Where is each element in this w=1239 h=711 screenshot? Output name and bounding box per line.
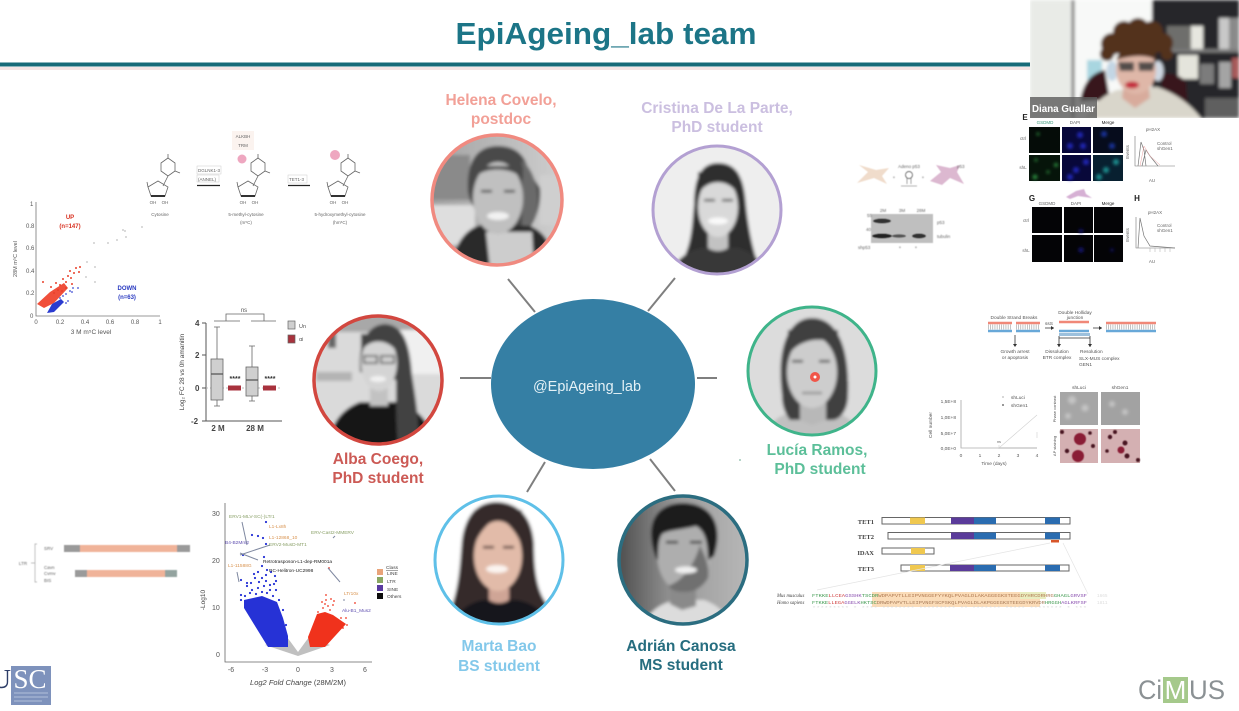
diagram: double strand break repair: Double Strand Breaks <box>991 315 1038 321</box>
legend: αi <box>299 337 303 343</box>
chart: m5C scatter plot: 0.2 <box>56 320 65 326</box>
diagram: double strand break repair: SLX-MUS complex <box>1079 356 1120 362</box>
panel H: histogram: Events <box>1125 227 1130 242</box>
centre hub: @EpiAgeing_lab: @EpiAgeing_lab <box>533 378 641 395</box>
chart: box plot log2 FC: ns <box>241 308 247 314</box>
molecule: cytosine <box>147 154 180 217</box>
volcano: gene labels: ERV1-MLV-SC(-)LTr1 <box>229 514 275 520</box>
panel E: immunofluorescence images: Merge <box>1102 120 1115 125</box>
volcano: gene labels: L1-12868_10 <box>269 535 298 541</box>
sequence alignment: Homo sapiens <box>776 601 804 606</box>
sequence alignment: 1811 <box>1097 601 1108 606</box>
webcam: mug <box>1087 60 1102 80</box>
western blot: 40 <box>866 227 872 232</box>
label: Marta Bao: BS student <box>458 658 540 675</box>
chart: box plot log2 FC: 4 <box>195 319 200 328</box>
portrait: Helena Covelo <box>430 134 564 268</box>
panel H: histogram: H <box>1134 194 1140 203</box>
volcano: callout lines <box>237 522 345 600</box>
volcano: legend: LINE <box>387 571 398 577</box>
chart: m5C scatter plot: 0.6 <box>26 246 35 252</box>
western blot: 3M <box>899 208 905 213</box>
chart: volcano plot <box>200 503 402 687</box>
chart: m5C scatter plot: 1 <box>30 202 34 208</box>
chart: m5C scatter plot <box>12 202 162 336</box>
scatter: grey points <box>86 227 142 282</box>
micrographs: phase contrast and AP staining: shLuci <box>1072 385 1086 391</box>
sequence alignment: Mus musculus <box>776 594 804 599</box>
logo: CiMUS: US <box>1189 675 1225 705</box>
panel G: immunofluorescence images: shL <box>1022 248 1030 253</box>
volcano: gene labels <box>225 514 371 614</box>
chart: box plot log2 FC: 2 M <box>211 424 225 433</box>
label: Adrián Canosa <box>626 638 736 674</box>
panel E: immunofluorescence images <box>1019 113 1123 181</box>
panel H: histogram <box>1125 194 1175 264</box>
panel E: histogram: Events <box>1125 144 1130 159</box>
panel E: histogram: pH2AX <box>1146 127 1160 132</box>
IDAX bar <box>882 548 934 554</box>
diagram: TET domain architecture <box>817 518 1088 594</box>
TET3 bar <box>901 565 1069 571</box>
chart: volcano plot: -3 <box>262 667 268 674</box>
panel E: histogram: Control <box>1157 141 1172 146</box>
sequence alignment: FTKKE LLEGA GGELK HKTSC DRWDPAPVTLLEIPVNGFSCPSKQLPVAGLDLAKPGGEGKSTEEGDYKRVDR HRGGH AGLKRFSF <box>812 601 1087 606</box>
panel G: immunofluorescence images: G <box>1029 194 1035 203</box>
chart: cell number growth curve <box>928 395 1039 467</box>
volcano: gene labels: L1-Lx8h <box>269 524 287 530</box>
molecule: 5-methyl-cytosine: TRM <box>238 143 248 148</box>
molecule: 5-methyl-cytosine: OH <box>240 200 246 205</box>
molecule: cytosine: Cytosine <box>151 212 169 217</box>
diagram: LTR structures: SRV <box>44 546 53 551</box>
molecule: 5-hydroxymethyl-cytosine: 5-hydroxymethyl-cytosine <box>314 212 366 217</box>
panel E: immunofluorescence images: DAPI <box>1070 120 1080 125</box>
diagram: LTR structures: Cavn <box>44 565 55 570</box>
chart: m5C scatter plot: 0.8 <box>26 224 35 230</box>
panel E: histogram <box>1125 127 1175 183</box>
chart: box plot log2 FC: 0 <box>195 384 200 393</box>
chart: m5C scatter plot: (n=63) <box>118 295 136 301</box>
volcano: gene labels: ERV2-MusD-MT1 <box>269 542 307 548</box>
label: Lucía Ramos: Lucía Ramos, <box>767 442 867 459</box>
webcam: neck <box>1121 88 1151 108</box>
chart: volcano plot: 6 <box>363 667 367 674</box>
label: Adrián Canosa: Adrián Canosa <box>626 638 736 655</box>
volcano: non-significant <box>265 637 330 656</box>
micrographs: phase contrast and AP staining: AP staining <box>1052 436 1057 456</box>
molecule: 5-methyl-cytosine: OH <box>252 200 258 205</box>
volcano: gene labels: B4-B2Mm2 <box>225 540 249 546</box>
chart: cell number growth curve: 0 <box>960 453 963 459</box>
panel E: immunofluorescence images: shL <box>1019 165 1027 170</box>
western blot: 55 <box>867 213 873 218</box>
chart: box plot log2 FC: 28 M <box>246 424 264 433</box>
label: Alba Coego <box>332 451 424 487</box>
icon: red pointer dot <box>810 372 820 382</box>
logo: CiMUS <box>1138 675 1225 705</box>
chart: box plot log2 FC: Log₂ FC 28 vs 0h amanitin <box>179 333 186 410</box>
molecule: 5-methyl-cytosine <box>228 131 270 225</box>
chart: volcano plot: 0 <box>216 652 220 659</box>
diagram: p53 knockdown cells <box>857 164 965 186</box>
webcam: face <box>1114 53 1158 93</box>
molecule: 5-methyl-cytosine: ALKBH <box>236 134 250 139</box>
chart: cell number growth curve: 1,5E+8 <box>941 399 956 405</box>
chart: box plot log2 FC: **** <box>265 376 276 383</box>
chart: volcano plot: 3 <box>330 667 334 674</box>
western blot: shp53 <box>858 245 871 250</box>
webcam: headphones <box>1106 61 1118 81</box>
chart: cell number growth curve: 1,0E+8 <box>941 415 956 421</box>
chart: m5C scatter plot: 0.4 <box>26 269 35 275</box>
portrait: Lucía Ramos <box>746 305 878 437</box>
diagram: TET domain architecture: TET3 <box>858 566 875 573</box>
chart: cell number growth curve: 4 <box>1036 453 1039 459</box>
diagram: p53 knockdown cells: + <box>922 175 925 180</box>
panel E: histogram: shGen1 <box>1157 146 1173 151</box>
chart: volcano plot: 0 <box>296 667 300 674</box>
chart: m5C scatter plot: 0.6 <box>106 320 115 326</box>
chart: m5C scatter plot: UP <box>66 215 74 221</box>
chart: cell number growth curve: Time (days) <box>981 461 1007 467</box>
volcano: legend <box>377 565 402 600</box>
panel H: histogram: shGen1 <box>1157 228 1173 233</box>
western blot: + <box>915 245 918 250</box>
panel H: histogram: Control <box>1157 223 1172 228</box>
label: Adrián Canosa: MS student <box>639 657 723 674</box>
chart: box plot log2 FC: **** <box>230 376 241 383</box>
title: EpiAgeing_lab team <box>456 16 756 51</box>
diagram: double strand break repair: ssS <box>1045 321 1053 327</box>
enzyme arrows <box>197 166 310 186</box>
diagram: double strand break repair: junction <box>1066 315 1084 321</box>
diagram: double strand break repair: Dissolution <box>1045 349 1069 355</box>
chart: box plot log2 FC <box>179 308 306 433</box>
chart: cell number growth curve: Cell number <box>928 412 934 438</box>
chart: m5C scatter plot: 1 <box>158 320 162 326</box>
diagram: double strand break repair <box>988 310 1156 368</box>
chart: cell number growth curve: 5,0E+7 <box>941 431 956 437</box>
logo: CiMUS: Ci <box>1138 675 1162 705</box>
western blot: + <box>899 245 902 250</box>
western blot: tubulin <box>937 234 951 239</box>
diagram: LTR structures <box>19 544 190 583</box>
diagram: LTR structures: Cvmv <box>44 571 56 576</box>
molecule: 5-hydroxymethyl-cytosine: OH <box>342 200 348 205</box>
volcano: gene labels: Alu-B1_Mus2 <box>342 608 371 614</box>
volcano: legend: SINE <box>387 587 398 593</box>
portrait: Marta Bao <box>434 495 564 628</box>
label: Cristina De La Parte: Cristina De La Parte, <box>641 100 793 117</box>
chart: m5C scatter plot: (n=147) <box>59 224 81 230</box>
chart: volcano plot: -6 <box>228 667 234 674</box>
micrographs: phase contrast and AP staining: shGen1 <box>1112 385 1129 391</box>
logo: USC: SC <box>13 664 47 694</box>
diagram: LTR structures: BIS <box>44 578 51 583</box>
molecule: 5-methyl-cytosine: (m⁵C) <box>240 220 252 225</box>
chart: m5C scatter plot: 0.2 <box>26 291 35 297</box>
panel E: immunofluorescence images: E <box>1022 113 1028 122</box>
chart: m5C scatter plot: 3 M m⁵C level <box>71 329 112 336</box>
sequence alignment: ********* * **** ******** ********* ** ******* ***** ******** * *** <box>812 606 1088 612</box>
chart: cell number growth curve: ns <box>997 440 1001 444</box>
legend <box>288 321 306 343</box>
chart: cell number growth curve: 3 <box>1017 453 1020 459</box>
volcano: up-regulated points <box>308 612 346 647</box>
molecule: 5-methyl-cytosine: 5-methyl-cytosine <box>228 212 264 217</box>
centre hub: @EpiAgeing_lab <box>491 299 695 469</box>
diagram: double strand break repair: Double Holliday <box>1058 310 1092 316</box>
chart: m5C scatter plot: 0.4 <box>81 320 90 326</box>
label: Alba Coego: PhD student <box>332 470 424 487</box>
volcano: legend: Class <box>386 565 399 571</box>
TET2 bar <box>888 532 1070 542</box>
sequence alignment: FTKKE LLCEA GSSHK TSCDR WDPAPVTLLEIPVNGGEFYYKQLPVAGLDLAKAGGEGKSTEEGDYHRCDRHRG GHAGL GRVSF <box>812 594 1087 599</box>
stray speck <box>739 459 741 461</box>
logo: CiMUS: M <box>1165 675 1186 705</box>
label: Alba Coego: Alba Coego, <box>333 451 423 468</box>
diagram: TET domain architecture: TET2 <box>858 534 874 541</box>
chart: volcano plot: 20 <box>212 558 220 565</box>
diagram: TET domain architecture: IDAX <box>857 550 874 557</box>
TET1 bar <box>882 518 1070 524</box>
boxes treated <box>228 386 276 390</box>
label: Marta Bao <box>458 638 540 675</box>
portrait: Alba Coego <box>312 314 444 448</box>
legend: Un <box>299 324 306 330</box>
chart: cell number growth curve: shGen1 <box>1011 403 1028 409</box>
webcam name tag: Diana Guallar <box>1032 103 1095 115</box>
chart: m5C scatter plot: 28M m⁵C level <box>12 241 19 277</box>
diagram: TET domain architecture: TET1 <box>858 519 874 526</box>
chart: box plot log2 FC: -2 <box>191 417 199 426</box>
label: Cristina De La Parte <box>641 100 793 136</box>
diagram: double strand break repair: or apoptosis <box>1002 355 1029 361</box>
portrait: Adrián Canosa <box>618 494 750 628</box>
western blot <box>858 208 951 250</box>
title rule <box>0 62 1030 70</box>
diagram: cytosine methylation pathway <box>147 131 366 225</box>
volcano: gene labels: Retrotrasposon-L1-dep-RM001a <box>263 559 332 565</box>
molecule: 5-hydroxymethyl-cytosine: OH <box>330 200 336 205</box>
enzyme arrows: DGLNK1-3 <box>198 168 221 173</box>
panel G: immunofluorescence images: GSDMD <box>1039 201 1056 206</box>
panel G: immunofluorescence images <box>1022 189 1123 262</box>
panel G: immunofluorescence images: ctrl <box>1023 218 1029 223</box>
diagram: p53 knockdown cells: Adeno p53 <box>898 164 920 169</box>
chart: volcano plot: -Log10 <box>200 590 207 610</box>
chart: cell number growth curve: shLuci <box>1011 395 1025 401</box>
chart: m5C scatter plot: DOWN <box>118 286 136 292</box>
connector lines <box>460 278 717 492</box>
logo: USC <box>0 664 51 705</box>
molecule: 5-hydroxymethyl-cytosine: (hm⁵C) <box>333 220 348 225</box>
enzyme arrows: (ANNEL) <box>198 177 217 182</box>
western blot: p53 <box>937 220 945 225</box>
molecule: 5-hydroxymethyl-cytosine <box>314 150 366 225</box>
molecule: cytosine: OH <box>150 200 156 205</box>
diagram: p53 knockdown cells: p53 <box>957 164 965 169</box>
diagram: double strand break repair: Growth arrest <box>1000 349 1030 355</box>
chart: cell number growth curve: 1 <box>979 453 982 459</box>
chart: volcano plot: 30 <box>212 511 220 518</box>
western blot: 28M <box>917 208 926 213</box>
panel E: histogram: AU <box>1149 178 1155 183</box>
label: Helena Covelo: Helena Covelo, <box>445 92 557 109</box>
chart: volcano plot: Log2 Fold Change (28M/2M) <box>250 678 346 687</box>
panel H: histogram: pH2AX <box>1148 210 1162 215</box>
volcano: down-regulated points <box>244 596 288 647</box>
panel E: immunofluorescence images: ctrl <box>1020 136 1026 141</box>
panel E: immunofluorescence images: GSDMD <box>1037 120 1054 125</box>
boxes untreated <box>211 327 258 406</box>
panel H: histogram: AU <box>1149 259 1155 264</box>
webcam: cardigan <box>1085 87 1201 118</box>
scatter: red points <box>37 283 68 308</box>
panel G: immunofluorescence images: DAPI <box>1071 201 1081 206</box>
webcam: chair <box>1078 68 1187 104</box>
portrait: Cristina De La Parte <box>650 144 784 278</box>
label: Cristina De La Parte: PhD student <box>671 119 763 136</box>
diagram: double strand break repair: GEN1 <box>1079 362 1092 368</box>
label: Marta Bao: Marta Bao <box>462 638 536 655</box>
label: Lucía Ramos <box>767 442 867 478</box>
sequence alignment: 1665 <box>1097 594 1108 599</box>
volcano: legend: LTR <box>387 579 396 585</box>
chart: m5C scatter plot: 0.8 <box>131 320 140 326</box>
chart: cell number growth curve: 0,0E+0 <box>941 446 956 452</box>
webcam panel: Diana Guallar <box>1030 0 1239 118</box>
volcano: gene labels: ERV-Cast2-MMERV <box>311 530 355 536</box>
chart: cell number growth curve: 2 <box>998 453 1001 459</box>
micrographs: phase contrast and AP staining: Phase contrast <box>1052 395 1057 422</box>
label: Helena Covelo <box>445 92 557 128</box>
molecule: cytosine: OH <box>162 200 168 205</box>
volcano: legend: Others <box>387 594 402 600</box>
micrographs: phase contrast and AP staining <box>1052 385 1140 463</box>
volcano: gene labels: LTr10x <box>344 591 359 597</box>
chart: box plot log2 FC: 2 <box>195 351 200 360</box>
sequence alignment <box>776 592 1108 612</box>
western blot: 2M <box>880 208 886 213</box>
diagram: double strand break repair: BTR complex <box>1043 355 1072 361</box>
chart: m5C scatter plot: 0 <box>34 320 38 326</box>
volcano: gene labels: RC-Helitron-UC2998 <box>269 568 314 574</box>
chart: volcano plot: 10 <box>212 605 220 612</box>
volcano: gene labels: L1-11588G <box>228 563 252 569</box>
scatter: blue points <box>47 299 64 313</box>
webcam name tag <box>1030 97 1097 118</box>
label: Helena Covelo: postdoc <box>471 111 532 128</box>
webcam: curly hair <box>1100 18 1173 61</box>
diagram: p53 knockdown cells: + <box>893 175 896 180</box>
diagram: double strand break repair: Resolution <box>1080 349 1103 355</box>
label: Lucía Ramos: PhD student <box>774 461 866 478</box>
diagram: LTR structures: LTR <box>19 561 28 566</box>
panel G: immunofluorescence images: Merge <box>1102 201 1115 206</box>
enzyme arrows: TET1-3 <box>289 177 305 182</box>
chart: m5C scatter plot: 0 <box>30 314 34 320</box>
